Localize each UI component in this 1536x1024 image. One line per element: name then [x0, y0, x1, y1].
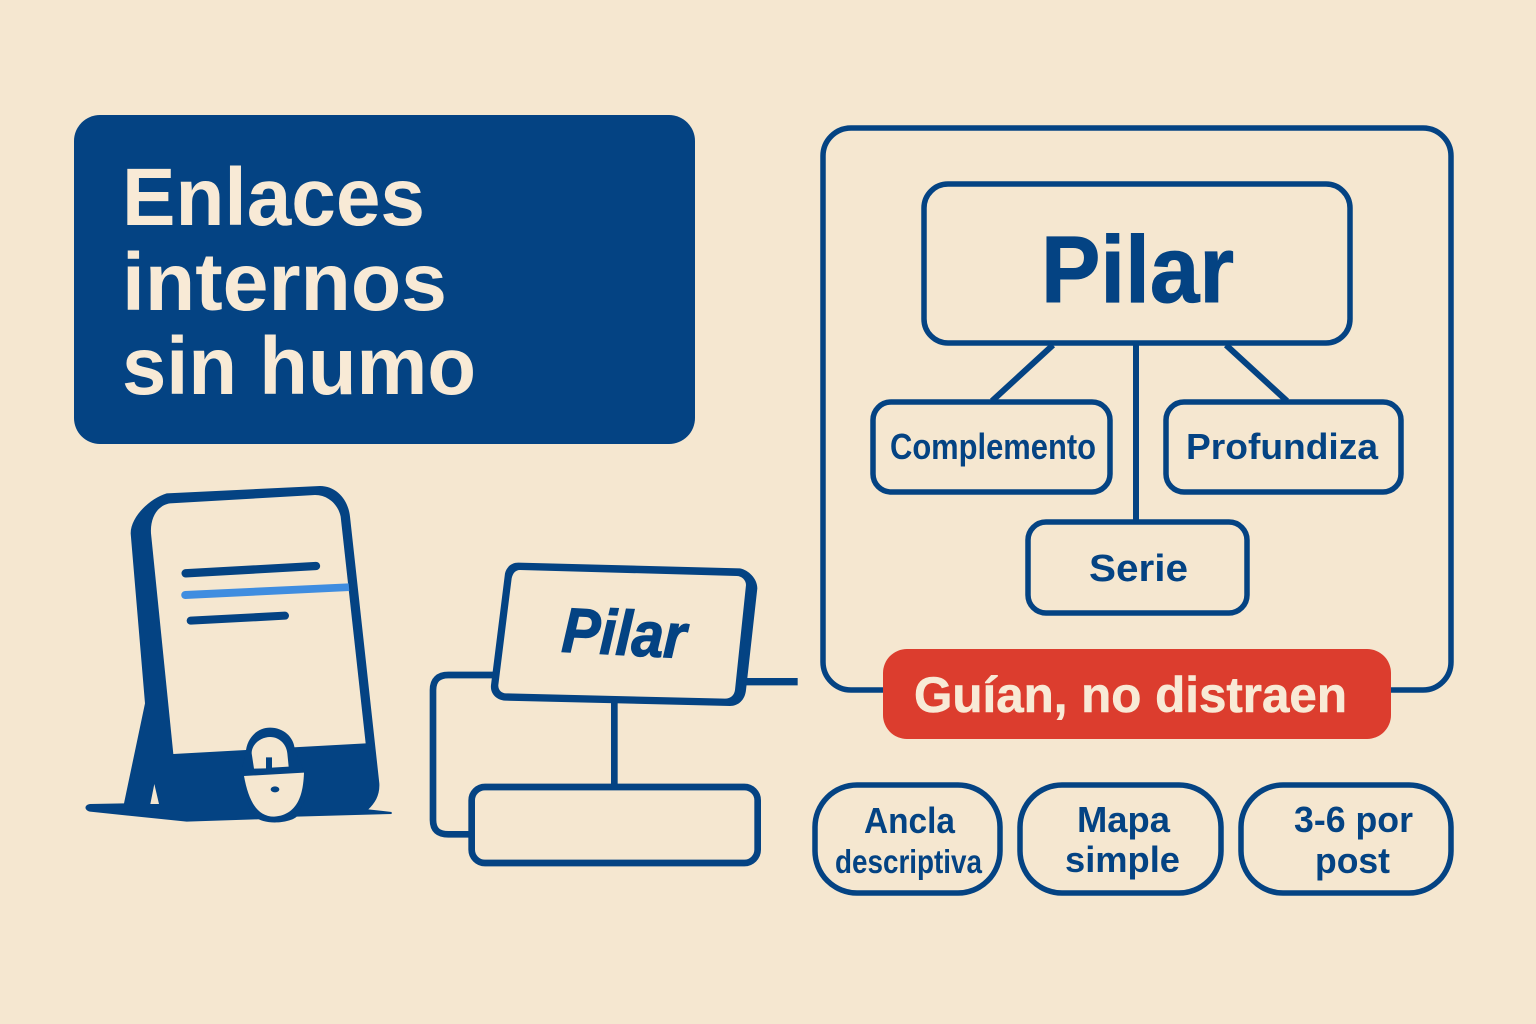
icon: tablet with padlock: [85, 486, 392, 822]
pill: 3-6 por post: 3-6 por: [1294, 799, 1413, 840]
box: Profundiza: Profundiza: [1186, 426, 1379, 467]
pill: 3-6 por post: post: [1315, 840, 1390, 881]
title panel: Enlaces: [122, 152, 425, 243]
title panel: internos: [122, 237, 447, 328]
icon: padlock: [240, 728, 310, 822]
pill: Mapa simple: Mapa: [1077, 799, 1171, 840]
pill: Mapa simple: simple: [1065, 839, 1180, 880]
box: Profundiza: [1166, 402, 1401, 492]
small diagram: tilted pilar with child box: Pilar: [560, 596, 691, 672]
pill: Ancla descriptiva: descriptiva: [835, 843, 983, 880]
box: Complemento: [873, 402, 1110, 492]
box: Pilar: Pilar: [1041, 217, 1234, 323]
pill: Ancla descriptiva: Ancla: [864, 800, 956, 841]
box: Serie: Serie: [1089, 548, 1188, 590]
panel: pillar hierarchy frame: [823, 128, 1451, 690]
pill: Mapa simple: [1020, 785, 1221, 893]
title panel: [74, 115, 695, 444]
callout: red banner: Guían, no distraen: [914, 667, 1347, 723]
callout: red banner: [883, 649, 1391, 739]
connectors: [992, 345, 1287, 522]
title panel: sin humo: [122, 321, 476, 412]
pill: Ancla descriptiva: [815, 785, 1000, 893]
box: Pilar: [924, 184, 1350, 343]
pill: 3-6 por post: [1241, 785, 1451, 893]
box: Complemento: Complemento: [890, 426, 1096, 467]
small diagram: tilted pilar with child box: [433, 563, 798, 863]
box: Serie: [1028, 522, 1247, 613]
